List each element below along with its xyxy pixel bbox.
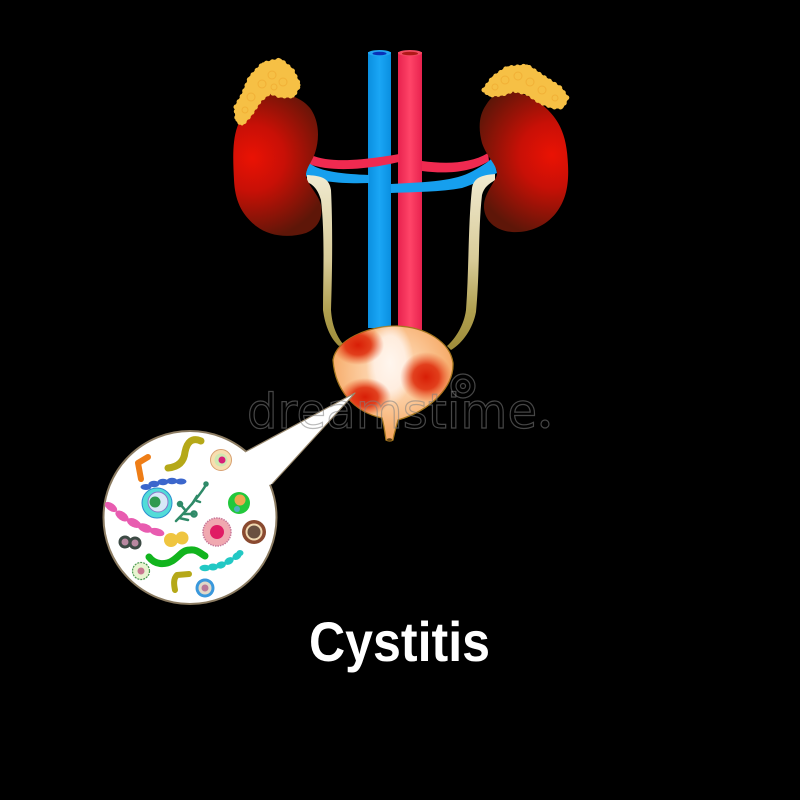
infographic canvas xyxy=(102,50,570,672)
renal veins xyxy=(305,157,497,193)
left kidney xyxy=(233,93,321,236)
bacteria chain: pink xyxy=(103,500,165,538)
right ureter xyxy=(447,174,495,350)
title: Cystitis xyxy=(309,610,490,673)
bacteria chain: cyan xyxy=(200,550,244,571)
diplococcus: dark xyxy=(118,536,142,550)
diplococcus: yellow xyxy=(164,532,188,547)
cell: small green ring xyxy=(132,562,150,580)
vena cava xyxy=(368,50,391,328)
bacteria chain: blue xyxy=(140,478,186,490)
bacterium: olive hook xyxy=(174,574,189,590)
renal arteries xyxy=(309,153,489,172)
cell: pink spiked xyxy=(203,518,231,546)
aorta xyxy=(398,50,422,330)
cell: green spiked xyxy=(228,492,250,514)
cell: blue ring xyxy=(196,578,214,598)
watermark: dreamstime xyxy=(247,384,537,440)
bladder xyxy=(332,321,453,441)
cell: brown spiked xyxy=(242,520,266,544)
bacterium: orange rod xyxy=(138,457,148,479)
cell: teal nucleus xyxy=(142,488,172,518)
bacterium: green spiral xyxy=(149,550,205,564)
left ureter xyxy=(307,175,343,346)
cell: pink ring xyxy=(210,450,232,470)
magnifier callout xyxy=(103,393,355,604)
left adrenal gland xyxy=(236,60,299,124)
right adrenal gland xyxy=(484,66,567,107)
right kidney xyxy=(480,91,568,232)
bacterium: olive spiral xyxy=(168,440,201,468)
microbe: green branching xyxy=(176,482,208,521)
